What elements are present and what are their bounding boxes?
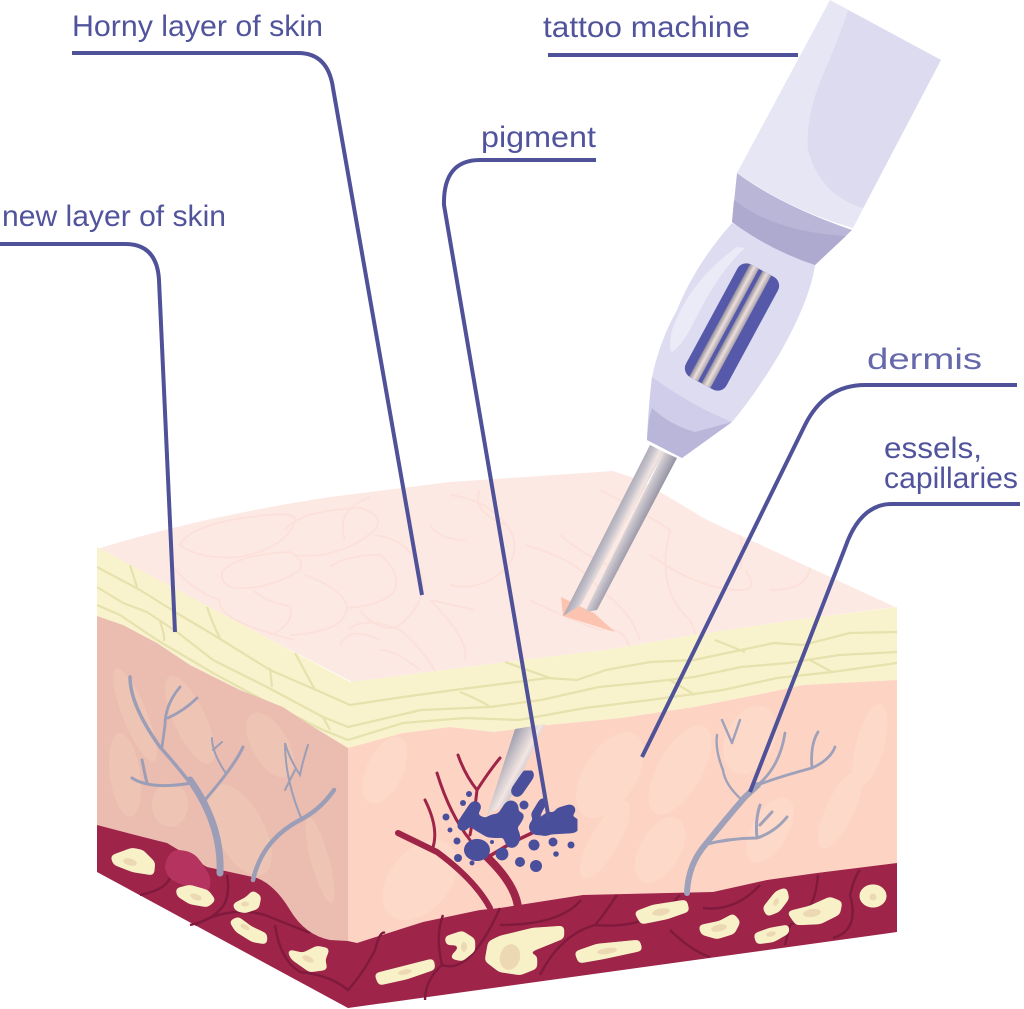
fat cell cores [122, 857, 877, 976]
body shading [808, 10, 941, 208]
label: pigment: pigment [481, 121, 597, 154]
label: essels, capillaries: essels, [884, 432, 982, 465]
label: dermis: dermis [867, 343, 982, 376]
pink spot [165, 850, 210, 892]
label: new layer of skin: new layer of skin [2, 200, 226, 233]
yellow layer: new layer of skin [97, 547, 897, 748]
label: essels, capillaries: capillaries [884, 462, 1018, 495]
blood layer: red band [97, 825, 897, 1008]
top face: horny layer [97, 471, 895, 682]
fat cells [113, 850, 884, 983]
machine collar [732, 173, 852, 265]
pigment blobs [463, 775, 572, 861]
needle inside skin [487, 724, 545, 815]
pigment particles [442, 775, 574, 872]
machine lower cone [647, 377, 732, 458]
tattoo machine [561, 0, 941, 632]
needles [563, 445, 677, 616]
machine grip [652, 223, 815, 422]
label: Horny layer of skin: Horny layer of skin [72, 10, 323, 43]
puncture wound [561, 597, 615, 632]
left face: dermis side [97, 616, 348, 965]
red vessels [398, 755, 532, 908]
leader lines [0, 53, 1020, 820]
pigment dots [442, 791, 574, 872]
machine body [737, 0, 941, 228]
dark capillaries in band [140, 870, 860, 1000]
grip highlight [670, 247, 745, 352]
grey vessels: left face [130, 677, 334, 880]
grip window [681, 260, 783, 394]
grey vessels: right face [687, 720, 835, 893]
right face: dermis [348, 680, 897, 945]
label: tattoo machine: tattoo machine [543, 11, 750, 44]
skin block [97, 471, 897, 1008]
